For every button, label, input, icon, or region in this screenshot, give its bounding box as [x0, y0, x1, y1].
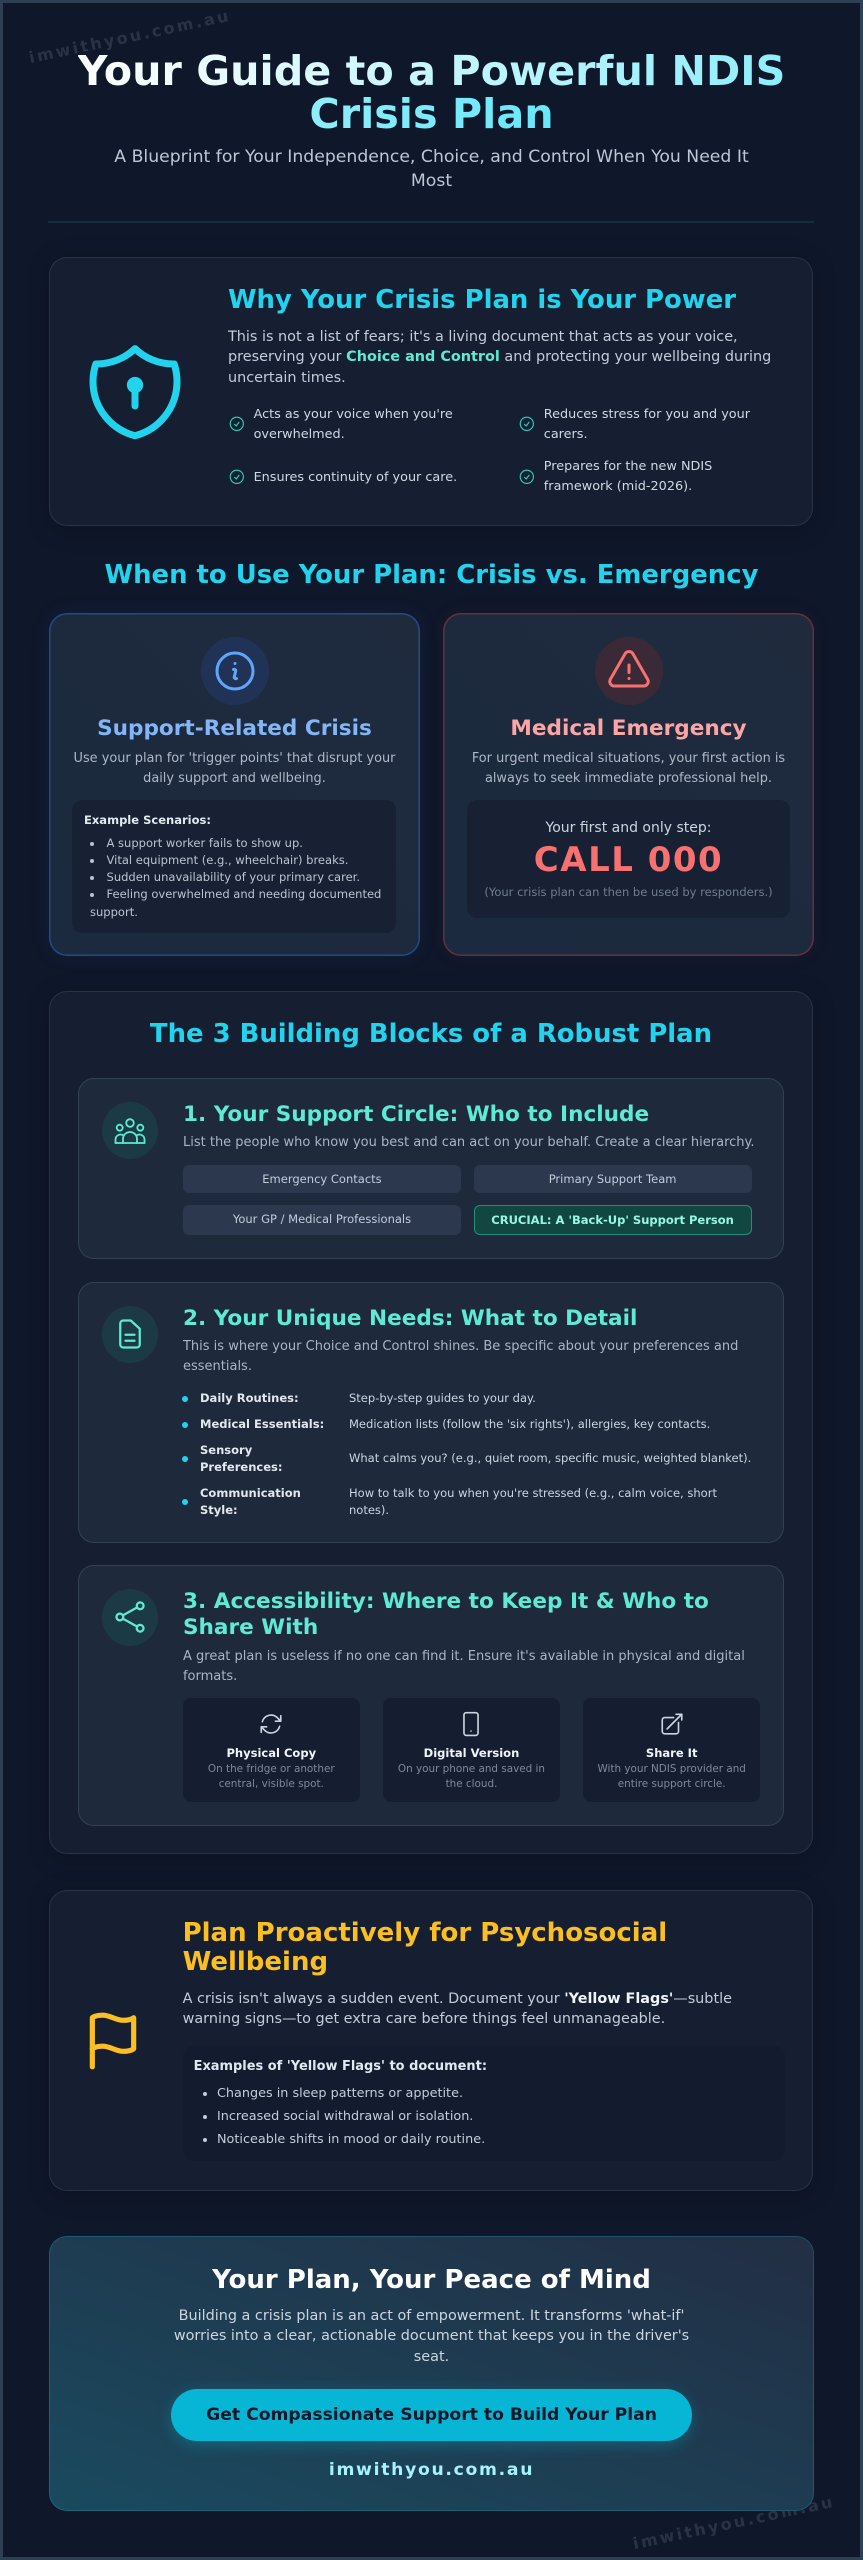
call 000 box: Your first and only step: [546, 820, 712, 836]
option: share it [583, 1698, 760, 1802]
detail: medical essentials: Medication lists (follow the 'six rights'), allergies, key contacts. [349, 1416, 710, 1430]
icon: warning in circle [594, 637, 662, 705]
heading: Your Plan, Your Peace of Mind [212, 2265, 651, 2295]
panel: 3 building blocks [49, 991, 813, 1854]
detail: sensory preferences [182, 1442, 751, 1474]
yellow flag examples box: Increased social withdrawal or isolation. [217, 2108, 473, 2124]
option: physical copy [183, 1698, 360, 1802]
description: A crisis isn't always a sudden event. Document your 'Yellow Flags'—subtle [183, 1991, 732, 2007]
heading: Support-Related Crisis [97, 716, 372, 741]
option: physical copy: On the fridge or another [208, 1763, 335, 1775]
example scenarios box: Feeling overwhelmed and needing documented [107, 887, 381, 901]
detail: daily routines: Daily Routines: [200, 1390, 299, 1404]
option: digital version: the cloud. [446, 1778, 497, 1790]
intro text: This is not a list of fears; it's a living document that acts as your voice, [228, 329, 738, 345]
description [74, 751, 396, 786]
heading: Why Your Crisis Plan is Your Power [228, 285, 736, 315]
chip: GP: Your GP / Medical Professionals [233, 1212, 411, 1226]
benefit: continuity: Ensures continuity of your care. [254, 470, 457, 485]
panel: call to action [49, 2236, 814, 2511]
heading [183, 1918, 667, 1976]
intro text: preserving your Choice and Control and protecting your wellbeing during [228, 349, 771, 365]
description: This is where your Choice and Control shines. Be specific about your preferences and [183, 1339, 738, 1354]
call 000 box: (Your crisis plan can then be used by responders.) [484, 885, 773, 899]
example scenarios box: A support worker fails to show up. [107, 836, 303, 850]
heading: Medical Emergency [510, 716, 747, 741]
description: formats. [183, 1669, 237, 1684]
chip: emergency contacts: Emergency Contacts [262, 1172, 382, 1186]
description: Building a crisis plan is an act of empowerment. It transforms 'what-if' [179, 2308, 684, 2324]
detail: communication style [182, 1486, 717, 1517]
chip: crucial back-up person: CRUCIAL: A 'Back-Up' Support Person [491, 1213, 734, 1227]
option: share it: entire support circle. [618, 1778, 726, 1790]
heading: Share With [183, 1615, 318, 1640]
website url: imwithyou.com.au [329, 2460, 534, 2480]
description [174, 2308, 689, 2365]
watermark: top left: imwithyou.com.au [27, 6, 232, 67]
description [183, 1649, 745, 1684]
icon: check [230, 470, 244, 484]
detail: medical essentials: Medical Essentials: [200, 1416, 324, 1430]
icon: check [520, 470, 534, 484]
example scenarios box [72, 800, 396, 933]
intro text: uncertain times. [228, 370, 346, 386]
icon: shield with keyhole [90, 345, 180, 440]
description: A great plan is useless if no one can find it. Ensure it's available in physical and digital [183, 1649, 745, 1664]
intro text [228, 329, 771, 386]
icon: document [102, 1306, 158, 1363]
heading: Wellbeing [183, 1946, 328, 1976]
benefit: framework: framework (mid-2026). [544, 479, 692, 494]
icon: phone [463, 1712, 479, 1736]
description [182, 1991, 732, 2027]
benefit: voice: overwhelmed. [254, 427, 345, 442]
icon: refresh [260, 1714, 282, 1734]
description: For urgent medical situations, your first action is [472, 751, 785, 766]
call 000 box: CALL 000 [534, 840, 723, 880]
icon: check [230, 416, 244, 431]
panel: psychosocial wellbeing [49, 1890, 813, 2191]
option: digital version: Digital Version [424, 1746, 519, 1760]
panel: medical emergency [443, 613, 814, 956]
call 000 box [467, 800, 790, 918]
example scenarios box: Vital equipment (e.g., wheelchair) breaks. [107, 853, 348, 867]
detail: communication style: Style: [200, 1503, 238, 1517]
detail: communication style: notes). [349, 1503, 389, 1517]
option: physical copy: Physical Copy [226, 1746, 316, 1760]
chip: emergency contacts [183, 1165, 461, 1193]
block 2: unique needs [78, 1282, 784, 1543]
detail: daily routines: Step-by-step guides to your day. [349, 1390, 536, 1404]
section heading: crisis vs emergency: When to Use Your Plan: Crisis vs. Emergency [105, 560, 758, 590]
benefit: stress: carers. [544, 427, 588, 442]
benefit: stress [520, 407, 750, 442]
detail: sensory preferences: What calms you? (e.g., quiet room, specific music, weighted blanket). [349, 1451, 751, 1465]
title: Crisis Plan [309, 90, 554, 138]
detail: daily routines [182, 1390, 536, 1404]
option: share it: Share It [646, 1746, 697, 1760]
icon: info in circle [200, 637, 268, 705]
icon: share nodes [102, 1589, 158, 1646]
benefit: stress: Reduces stress for you and your [544, 407, 750, 422]
description: essentials. [183, 1359, 252, 1374]
heading: 3. Accessibility: Where to Keep It & Who to [183, 1589, 709, 1614]
heading: Plan Proactively for Psychosocial [183, 1918, 667, 1948]
panel: support-related crisis [49, 613, 420, 956]
description: daily support and wellbeing. [143, 771, 326, 786]
description: Use your plan for 'trigger points' that disrupt your [74, 751, 395, 766]
benefit: framework: Prepares for the new NDIS [544, 459, 712, 474]
heading: 2. Your Unique Needs: What to Detail [183, 1306, 637, 1331]
description: warning signs—to get extra care before things feel unmanageable. [183, 2011, 665, 2027]
description [182, 1339, 738, 1374]
icon: external share [661, 1713, 683, 1735]
example scenarios box: Example Scenarios: [84, 813, 211, 827]
benefit: voice [230, 407, 453, 442]
detail: sensory preferences: Sensory [200, 1442, 252, 1456]
icon: group [102, 1102, 158, 1159]
option: digital version [383, 1698, 560, 1802]
title [78, 47, 785, 138]
chip: crucial back-up person [474, 1205, 752, 1235]
icon: check [520, 416, 534, 431]
example scenarios box: support. [90, 905, 138, 919]
benefit: voice: Acts as your voice when you're [254, 407, 453, 422]
yellow flag examples box: Changes in sleep patterns or appetite. [217, 2086, 463, 2100]
example scenarios box: Sudden unavailability of your primary carer. [107, 870, 360, 884]
heading [183, 1589, 709, 1640]
detail: communication style: How to talk to you when you're stressed (e.g., calm voice, short [349, 1486, 717, 1500]
chip: primary support team [474, 1165, 752, 1193]
option: share it: With your NDIS provider and [597, 1763, 746, 1775]
heading: 1. Your Support Circle: Who to Include [183, 1102, 649, 1127]
benefit: framework [520, 459, 712, 494]
panel: why your crisis plan is your power [49, 257, 813, 526]
watermark: bottom right: imwithyou.com.au [631, 2492, 836, 2553]
yellow flag examples box [183, 2046, 785, 2161]
detail: medical essentials [182, 1416, 710, 1430]
subtitle [114, 147, 749, 191]
yellow flag examples box: Noticeable shifts in mood or daily routine. [217, 2132, 485, 2146]
title: Your Guide to a Powerful NDIS [78, 47, 785, 95]
chip: primary support team: Primary Support Team [549, 1172, 676, 1186]
section heading: The 3 Building Blocks of a Robust Plan [150, 1019, 712, 1049]
detail: sensory preferences: Preferences: [200, 1460, 283, 1474]
description: worries into a clear, actionable document that keeps you in the driver's [174, 2328, 689, 2344]
detail: communication style: Communication [200, 1486, 301, 1500]
subtitle: A Blueprint for Your Independence, Choice, and Control When You Need It [114, 147, 749, 167]
button: Get Compassionate Support to Build Your Plan [206, 2405, 657, 2425]
icon: yellow flag [90, 2012, 136, 2070]
option: physical copy: central, visible spot. [219, 1778, 324, 1790]
block 1: support circle [78, 1078, 784, 1259]
yellow flag examples box: Examples of 'Yellow Flags' to document: [194, 2059, 487, 2074]
block 3: accessibility [78, 1565, 784, 1826]
description [472, 751, 785, 786]
subtitle: Most [411, 171, 452, 191]
option: digital version: On your phone and saved in [398, 1763, 545, 1775]
description: seat. [414, 2349, 449, 2365]
button [171, 2389, 692, 2441]
description: always to seek immediate professional help. [485, 771, 772, 786]
chip: GP [183, 1205, 461, 1235]
description: List the people who know you best and can act on your behalf. Create a clear hierarchy. [183, 1135, 754, 1150]
